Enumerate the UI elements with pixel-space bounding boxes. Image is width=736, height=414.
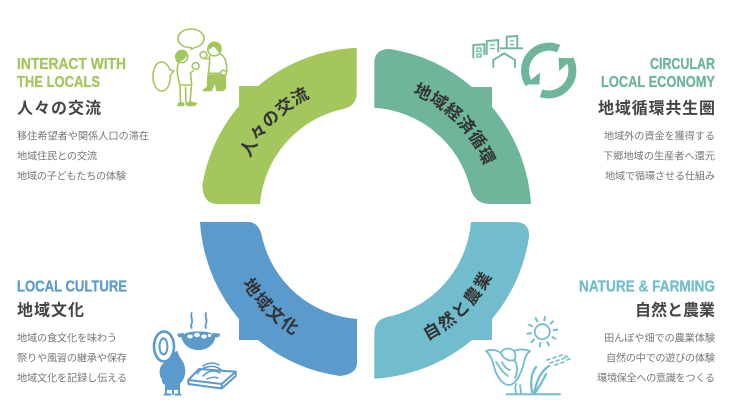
heading: interact with the locals: THE LOCALS	[17, 74, 100, 91]
text block: nature list: 田んぼや畑での農業体験	[604, 332, 715, 345]
panel: local culture	[17, 279, 127, 385]
text block: interact list: 移住希望者や関係人口の滞在	[17, 130, 149, 143]
ring segment: green 人々の交流	[202, 48, 357, 204]
text block: economy list: 地域外の資金を獲得する	[604, 130, 715, 143]
ring segment: green 人々の交流: 人々の交流	[240, 86, 310, 158]
title: 地域文化: 地域文化	[17, 302, 84, 320]
icon: food and festival	[154, 313, 236, 394]
text block: economy list	[603, 130, 715, 183]
heading: local culture: LOCAL CULTURE	[17, 279, 127, 296]
ring segment: light teal 自然と農業: 自然と農業	[424, 271, 492, 341]
title: 地域循環共生圏: 地域循環共生圏	[598, 100, 715, 118]
icon: town and recycling arrows	[473, 36, 573, 94]
heading: circular local economy: CIRCULAR	[650, 56, 715, 73]
heading: circular local economy	[601, 56, 716, 91]
ring segment: blue 地域文化	[200, 222, 357, 376]
text block: interact list: 地域住民との交流	[17, 150, 97, 163]
text block: economy list: 下郷地域の生産者へ還元	[603, 150, 715, 163]
text block: culture list: 地域の食文化を味わう	[17, 332, 117, 345]
text block: interact list: 地域の子どもたちの体験	[17, 170, 126, 183]
ring segment: teal 地域経済循環: 地域経済循環	[414, 82, 497, 165]
ring segment: teal 地域経済循環	[374, 49, 531, 204]
icon: people talking	[153, 29, 227, 106]
panel: interact with the locals	[17, 56, 149, 183]
heading: circular local economy: LOCAL ECONOMY	[601, 74, 716, 91]
text block: nature list	[597, 332, 715, 385]
text block: culture list: 地域文化を記録し伝える	[17, 372, 127, 385]
text block: economy list: 地域で循環させる仕組み	[605, 170, 715, 183]
heading: interact with the locals: INTERACT WITH	[17, 56, 126, 73]
ring segment: blue 地域文化: 地域文化	[244, 278, 298, 335]
heading: nature and farming: NATURE & FARMING	[579, 279, 715, 296]
text block: nature list: 環境保全への意識をつくる	[597, 372, 715, 385]
title: 自然と農業: 自然と農業	[635, 300, 715, 320]
panel: nature and farming	[579, 279, 715, 385]
ring segment: light teal 自然と農業	[374, 222, 530, 379]
text block: culture list: 祭りや風習の継承や保存	[17, 352, 127, 365]
text block: nature list: 自然の中での遊びの体験	[606, 352, 715, 365]
panel: circular local economy	[598, 56, 716, 183]
heading: interact with the locals	[17, 56, 126, 91]
text block: culture list	[17, 332, 127, 385]
text block: interact list	[17, 130, 149, 183]
title: 人々の交流: 人々の交流	[17, 100, 101, 118]
icon: flower, rice and sun	[486, 317, 570, 394]
